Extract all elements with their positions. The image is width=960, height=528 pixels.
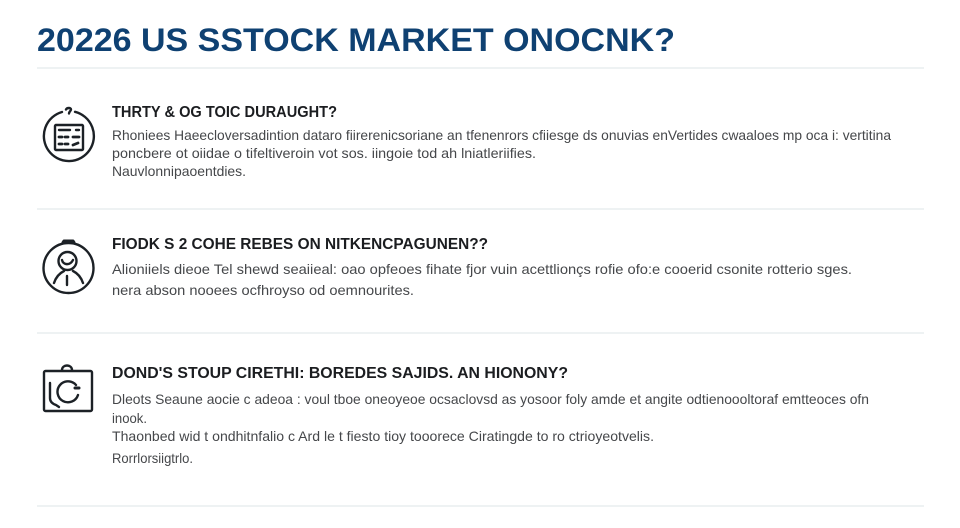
panel: section 2 xyxy=(44,236,852,298)
heading: section 3: DOND'S STOUP CIRETHI: BOREDES SAJIDS. AN HIONONY? xyxy=(112,365,568,382)
heading: section 2: FIODK S 2 COHE REBES ON NITKENCPAGUNEN?? xyxy=(112,236,488,253)
text block: section 3: Thaonbed wid t ondhitnfalio c Ard le t fiesto tioy tooorece Ciratingde to ro ctrioyeotvelis. xyxy=(112,428,654,444)
text block: section 2: Alioniiels dieoe Tel shewd seaiieal: oao opfeoes fihate fjor vuin acettlionçs rofie ofo:e cooerid csonite rotterio sges. xyxy=(112,261,852,277)
text block: section 2: nera abson nooees ocfhroyso od oemnourites. xyxy=(112,282,414,298)
text block: section 2 xyxy=(112,261,852,298)
text block: section 1 xyxy=(112,127,891,179)
icon: calendar in circle xyxy=(44,108,94,161)
panel: section 1 xyxy=(44,104,891,179)
icon: person in circle xyxy=(44,241,94,293)
panel: section 3 xyxy=(44,365,869,466)
text block: section 1: Rhoniees Haeecloversadintion dataro fiirerenicsoriane an tfenenrors cfiiesge ds onuvias enVertides cwaaloes mp oca i: vertitina xyxy=(112,127,891,143)
text block: section 1: poncbere ot oiidae o tifeltiveroin vot sos. iingoie tod ah lniatleriifies. xyxy=(112,145,536,161)
text block: section 3: Rorrlorsiigtrlo. xyxy=(112,450,193,466)
text block: section 3 xyxy=(112,391,869,466)
heading: section 1: THRTY & OG TOIC DURAUGHT? xyxy=(112,104,337,121)
icon: briefcase with arc xyxy=(44,366,92,411)
text block: section 3: inook. xyxy=(112,410,147,426)
text block: section 3: Dleots Seaune aocie c adeoa : voul tboe oneoyeoe ocsaclovsd as yosoor foly amde et angite odtienoooltoraf emtteoces ofn xyxy=(112,391,869,407)
text block: section 1: Nauvlonnipaoentdies. xyxy=(112,163,246,179)
title: 20226 US SSTOCK MARKET ONOCNK? xyxy=(37,22,675,58)
